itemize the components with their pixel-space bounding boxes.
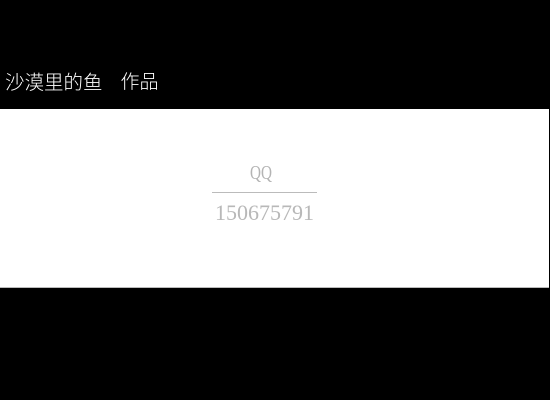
QQ number: 150675791 xyxy=(215,200,314,225)
panel: white contact band xyxy=(0,109,549,288)
QQ label: QQ xyxy=(250,162,272,184)
title: suffix: 作品 xyxy=(120,72,159,93)
title: 沙漠里的鱼 xyxy=(5,72,103,94)
